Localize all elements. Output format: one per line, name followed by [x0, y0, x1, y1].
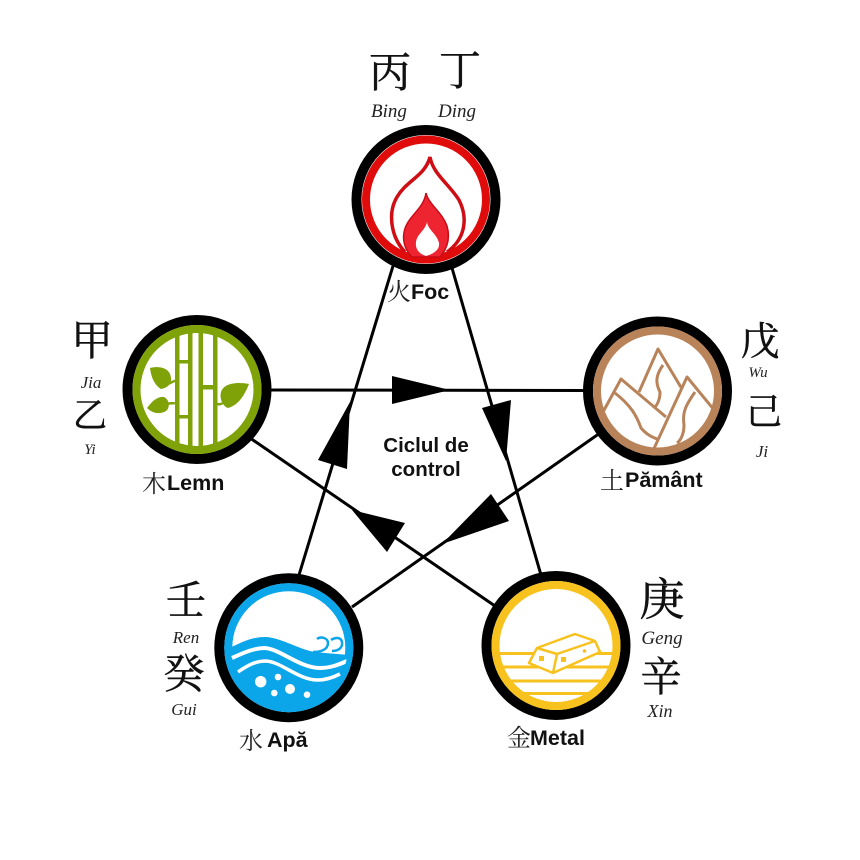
node: wood [71, 319, 266, 498]
label: Lemn: Lemn [167, 471, 224, 495]
glyph: Geng: 庚 [639, 575, 685, 625]
romanization: Bing Ding: Ding [437, 101, 476, 122]
icon: fire circle [356, 130, 496, 269]
center label: control cycle: control [391, 458, 461, 481]
romanization: Yi: Yi [84, 442, 96, 458]
icon: wood circle [128, 320, 266, 459]
arrow: wood to earth [271, 376, 584, 404]
glyph: Jia: 甲 [71, 319, 113, 365]
center label: control cycle: Ciclul de [383, 434, 469, 457]
icon: metal circle [486, 576, 626, 715]
arrow: water to fire [299, 266, 393, 575]
romanization: Bing Ding: Bing [371, 101, 407, 122]
label: Foc: 火 [387, 279, 411, 306]
arrow: earth to water [352, 433, 600, 607]
glyphs: Bing Ding: 丁 [439, 49, 481, 95]
label: Apă: 水 [239, 728, 263, 755]
romanization: Wu: Wu [748, 365, 768, 381]
icon: water circle [219, 578, 358, 717]
label: Pământ: 土 [600, 468, 624, 495]
glyphs: Bing Ding: 丙 [369, 51, 411, 97]
label: Apă: Apă [267, 728, 309, 752]
romanization: Geng: Geng [641, 628, 683, 649]
node: earth [588, 321, 782, 495]
label: Metal [507, 725, 585, 752]
node: fire [356, 49, 496, 306]
glyph: Wu: 戊 [740, 321, 780, 364]
label: Apă [239, 728, 309, 755]
glyphs: Bing Ding [369, 49, 481, 97]
glyph: Xin: 辛 [640, 654, 682, 700]
label: Pământ [600, 468, 703, 495]
romanization: Bing Ding [371, 101, 476, 122]
romanization: Ren: Ren [172, 628, 199, 647]
arrow: fire to metal [452, 268, 541, 575]
label: Pământ: Pământ [625, 468, 703, 492]
icon: earth circle [588, 322, 727, 460]
label: Foc: Foc [411, 280, 449, 304]
node: metal [486, 575, 685, 752]
romanization: Ji: Ji [756, 442, 768, 461]
node: water [164, 578, 358, 755]
romanization: Jia: Jia [81, 373, 101, 392]
romanization: Gui: Gui [171, 700, 197, 719]
glyph: Ren: 壬 [166, 578, 206, 623]
control cycle star arrows [250, 266, 600, 607]
glyph: Ji: 己 [746, 392, 782, 432]
label: Foc [387, 279, 449, 306]
label: Metal: Metal [530, 726, 585, 750]
arrow: metal to wood [250, 438, 495, 606]
label: Lemn [142, 471, 224, 498]
label: Lemn: 木 [142, 471, 166, 498]
glyph: Gui: 癸 [164, 651, 204, 697]
glyph: Yi: 乙 [73, 398, 107, 435]
romanization: Xin: Xin [646, 701, 672, 721]
label: Metal: 金 [507, 725, 531, 752]
